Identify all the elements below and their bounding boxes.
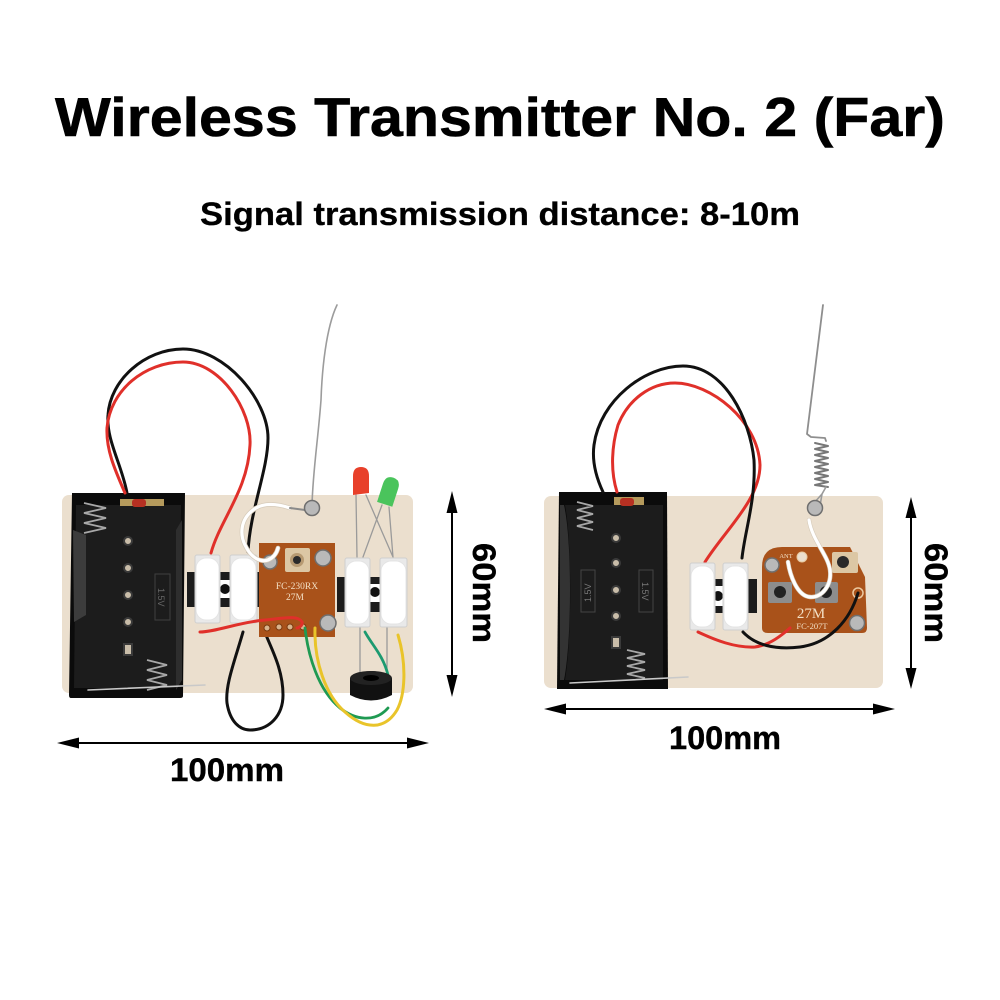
- title: Wireless Transmitter No. 2 (Far): [55, 86, 945, 148]
- left width dimension: 100mm: [170, 752, 284, 788]
- circuit board: FC-207T: [796, 621, 828, 631]
- board screws: [765, 558, 864, 630]
- polarity labels: 1.5V: [583, 583, 593, 602]
- red jumper wire: [200, 618, 302, 632]
- left receiver product: [62, 305, 413, 730]
- battery black wire top: [593, 366, 754, 558]
- right height dimension: [906, 497, 954, 689]
- black wire bottom loop: [227, 632, 283, 730]
- solder pad: [853, 588, 863, 598]
- battery holes: [612, 534, 620, 542]
- board labels: FC-230RX: [276, 582, 318, 592]
- circuit board: [762, 547, 867, 633]
- right width dimension: [544, 704, 895, 756]
- ANT pad: ANT: [779, 553, 793, 560]
- antenna screw: [304, 500, 320, 516]
- contacts and springs: [84, 503, 106, 533]
- left height dimension: 60mm: [466, 543, 502, 643]
- right width dimension: 100mm: [669, 720, 781, 756]
- battery red wire top: [107, 362, 250, 553]
- potentiometer: [832, 552, 858, 573]
- polarity label: 1.5V: [156, 588, 166, 607]
- polarity labels: 1.5V: [640, 582, 650, 601]
- LEDs: [353, 467, 401, 557]
- contacts and springs: [577, 502, 593, 530]
- black wire bottom: [743, 593, 858, 648]
- terminal block pair left: [187, 555, 263, 623]
- terminal blocks: [690, 563, 757, 630]
- left height dimension: [446, 491, 502, 697]
- potentiometer: [285, 548, 310, 572]
- subtitle: Signal transmission distance: 8-10m: [200, 196, 800, 232]
- battery tail: [88, 685, 205, 690]
- wood board: [544, 496, 883, 688]
- battery red wire top: [613, 383, 760, 562]
- circuit board left: [259, 543, 336, 637]
- polarity labels: [581, 570, 653, 612]
- buzzer with wires: [305, 628, 404, 725]
- battery tail: [570, 677, 688, 683]
- antenna screw: [808, 500, 822, 516]
- solder pads: [264, 624, 306, 631]
- battery black wire top: [108, 349, 268, 552]
- circuit board left: 27M: [286, 593, 305, 603]
- red wire bottom: [698, 628, 790, 647]
- battery holder: [69, 493, 205, 698]
- board screws: [263, 550, 336, 631]
- right transmitter product: [544, 305, 883, 689]
- antenna with spring: [807, 305, 828, 506]
- left width dimension: [57, 738, 429, 788]
- polarity label: [155, 574, 170, 620]
- white antenna wire: [242, 504, 305, 561]
- battery holes: [124, 537, 132, 545]
- white antenna wire: [788, 520, 830, 597]
- battery holder: [557, 492, 688, 689]
- terminal block pair right: [337, 558, 407, 627]
- wood board: [62, 495, 413, 693]
- push buttons: [768, 582, 838, 603]
- antenna wire: [312, 305, 337, 505]
- board labels: 27M: [797, 606, 825, 622]
- right height dimension: 60mm: [918, 543, 954, 643]
